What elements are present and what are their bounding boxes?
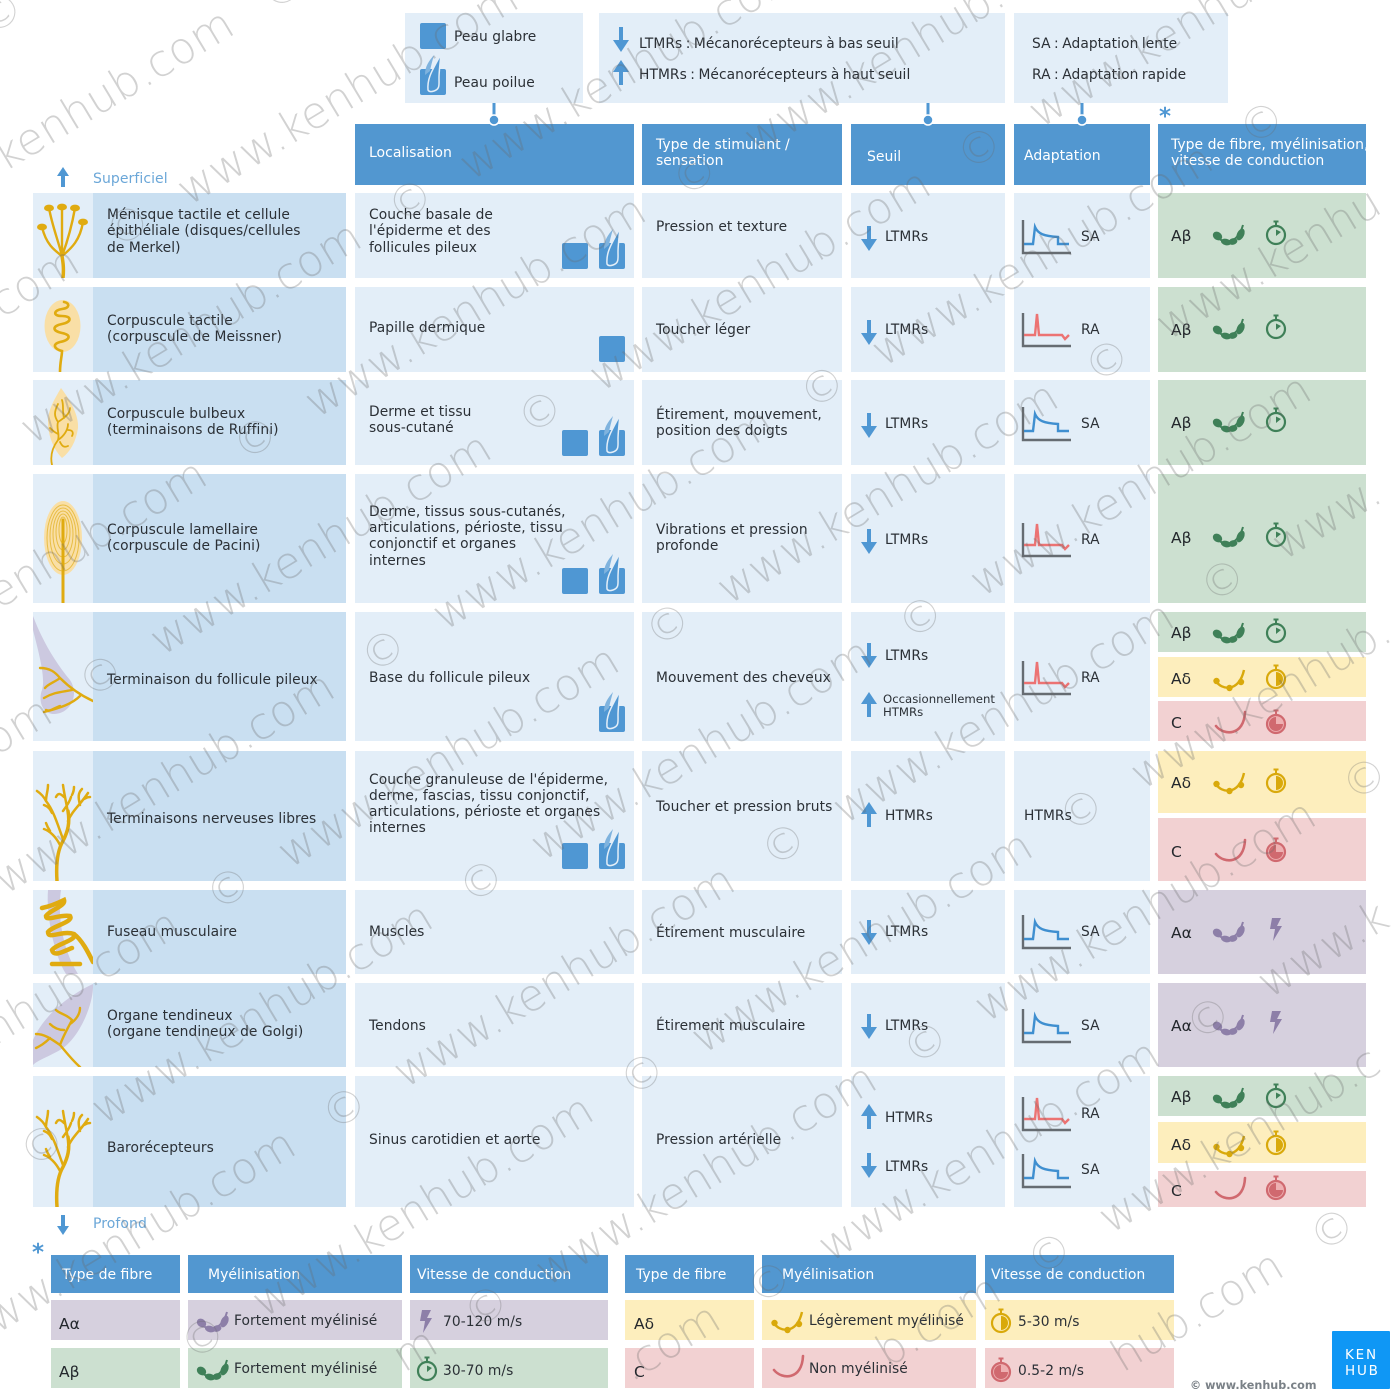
row 8: Golgi tendon organ: (organe tendineux de Golgi) bbox=[107, 1024, 303, 1040]
fibre key: right table: 0.5-2 m/s bbox=[1018, 1363, 1084, 1379]
icon: tendon organ bbox=[33, 984, 93, 1067]
row 9: baroreceptors: Sinus carotidien et aorte bbox=[369, 1132, 540, 1148]
icon: high threshold arrow bbox=[613, 60, 629, 85]
fibre cells: C bbox=[1171, 714, 1182, 732]
watermark: m © www.kenhub.com © www.kenhub.com © bbox=[383, 746, 1397, 1383]
row 4: Pacini: LTMRs bbox=[885, 532, 928, 548]
fibre key: left table bbox=[51, 1255, 608, 1388]
row 9: baroreceptors bbox=[33, 1076, 1366, 1207]
icon: Meissner corpuscle bbox=[44, 300, 80, 372]
column headers: Localisation bbox=[369, 145, 452, 161]
row 2: Meissner: (corpuscule de Meissner) bbox=[107, 329, 282, 345]
row 6: free nerve endings: Terminaisons nerveuses libres bbox=[106, 811, 316, 827]
row 2: Meissner: LTMRs bbox=[885, 322, 928, 338]
fibre cells: Aβ bbox=[1171, 1088, 1192, 1106]
fibre key: left table: 30-70 m/s bbox=[443, 1363, 513, 1379]
row 7: muscle spindle: Fuseau musculaire bbox=[107, 924, 237, 940]
row 7: muscle spindle: Aα bbox=[1171, 924, 1192, 942]
row 4: Pacini: Derme, tissus sous-cutanés, bbox=[369, 504, 566, 520]
watermark: © www.kenhub.com © www.kenhub.com © www.kenhub. bbox=[171, 605, 1400, 1371]
logo: HUB bbox=[1345, 1363, 1380, 1379]
row 3: Ruffini: LTMRs bbox=[885, 416, 928, 432]
fibre cells: C bbox=[1171, 843, 1182, 861]
fibre key: left table: Aβ bbox=[59, 1363, 80, 1381]
row 4: Pacini: articulations, périoste, tissu bbox=[369, 520, 563, 536]
row 5: hair follicle: Terminaison du follicule pileux bbox=[106, 672, 318, 688]
icon: hairy skin bbox=[599, 691, 625, 732]
fibre key: left table: Aα bbox=[59, 1315, 80, 1333]
row 1: Merkel: Ménisque tactile et cellule bbox=[107, 207, 290, 223]
column headers: Type de stimulant / bbox=[655, 137, 790, 153]
icon: muscle spindle bbox=[42, 890, 93, 974]
depth arrow: deep: Profond bbox=[93, 1216, 147, 1232]
row 3: Ruffini: (terminaisons de Ruffini) bbox=[107, 422, 279, 438]
fibre cells: Aδ bbox=[1171, 774, 1191, 792]
row 9: baroreceptors: Barorécepteurs bbox=[107, 1140, 214, 1156]
legend: skin types bbox=[405, 13, 583, 103]
fibre key: right table: Type de fibre bbox=[635, 1267, 726, 1283]
row 4: Pacini: Corpuscule lamellaire bbox=[107, 522, 258, 538]
row 1: Merkel: Couche basale de bbox=[369, 207, 493, 223]
row 6: free nerve endings bbox=[33, 751, 1366, 881]
row 3: Ruffini: Aβ bbox=[1171, 414, 1192, 432]
fibre key: left table: Type de fibre bbox=[61, 1267, 152, 1283]
row 1: Merkel: Pression et texture bbox=[656, 219, 787, 235]
row 6: free nerve endings: Couche granuleuse de l'épiderme, bbox=[369, 772, 608, 788]
row 2: Meissner: Aβ bbox=[1171, 321, 1192, 339]
fibre key: right table: Légèrement myélinisé bbox=[809, 1313, 964, 1329]
fibre cells: Aβ bbox=[1171, 624, 1192, 642]
fibre cells bbox=[1158, 1076, 1366, 1207]
label: LTMRs: LTMRs : Mécanorécepteurs à bas seuil bbox=[639, 36, 899, 52]
watermark: ww.kenhub.com © www.kenhub.com © www.kenhub.com © www. bbox=[0, 466, 1390, 1344]
asterisk: fibre column: * bbox=[1159, 104, 1171, 130]
column headers: Adaptation bbox=[1024, 148, 1101, 164]
row 8: Golgi tendon organ: Aα bbox=[1171, 1017, 1192, 1035]
fibre key: right table bbox=[625, 1255, 1174, 1388]
row 9: baroreceptors: SA bbox=[1081, 1162, 1100, 1178]
row 8: Golgi tendon organ bbox=[33, 983, 1366, 1067]
fibre key: left table: Vitesse de conduction bbox=[417, 1267, 571, 1283]
fibre key: left table: 70-120 m/s bbox=[443, 1314, 522, 1330]
legend connectors bbox=[489, 103, 1087, 125]
row 3: Ruffini: SA bbox=[1081, 416, 1100, 432]
row 6: free nerve endings: Toucher et pression bruts bbox=[655, 799, 832, 815]
row 7: muscle spindle bbox=[33, 890, 1366, 974]
fibre key: right table: Myélinisation bbox=[782, 1267, 874, 1283]
watermark: b.com © www.kenhub.c bbox=[867, 1036, 1389, 1378]
row 7: muscle spindle: SA bbox=[1081, 924, 1100, 940]
row 6: free nerve endings: HTMRs bbox=[885, 808, 933, 824]
row 2: Meissner: Corpuscule tactile bbox=[107, 313, 233, 329]
row 4: Pacini: profonde bbox=[656, 538, 718, 554]
copyright: © www.kenhub.com bbox=[1190, 1379, 1316, 1392]
row 3: Ruffini bbox=[33, 380, 1366, 465]
row 8: Golgi tendon organ: Tendons bbox=[368, 1018, 426, 1034]
fibre cells bbox=[1158, 612, 1366, 741]
depth arrow: deep bbox=[57, 1215, 147, 1235]
row 7: muscle spindle: LTMRs bbox=[885, 924, 928, 940]
fibre key: right table: Aδ bbox=[634, 1315, 654, 1333]
icon: Pacinian corpuscle bbox=[44, 501, 82, 603]
row 1: Merkel: épithéliale (disques/cellules bbox=[107, 223, 301, 239]
row 9: baroreceptors: HTMRs bbox=[885, 1110, 933, 1126]
row 4: Pacini: Aβ bbox=[1171, 529, 1192, 547]
row 4: Pacini: internes bbox=[369, 553, 426, 569]
row 3: Ruffini: position des doigts bbox=[656, 423, 788, 439]
column headers: Type de fibre, myélinisation, bbox=[1170, 137, 1368, 153]
row 3: Ruffini: Derme et tissu bbox=[369, 404, 471, 420]
icon: hair follicle ending bbox=[33, 616, 93, 714]
column headers: Seuil bbox=[867, 149, 901, 165]
watermark: .com © www.kenhub.com © www.k bbox=[611, 891, 1398, 1392]
row 4: Pacini: (corpuscule de Pacini) bbox=[107, 538, 261, 554]
logo: KEN bbox=[1345, 1347, 1378, 1363]
row 5: hair follicle: HTMRs bbox=[883, 705, 923, 719]
fibre cells: Aδ bbox=[1171, 670, 1191, 688]
icon: hairy skin bbox=[420, 54, 446, 95]
row 1: Merkel: l'épiderme et des bbox=[369, 223, 491, 239]
icon: glabrous skin bbox=[420, 23, 446, 49]
row 4: Pacini: conjonctif et organes bbox=[369, 536, 516, 552]
row 1: Merkel: SA bbox=[1081, 229, 1100, 245]
icon: Merkel disc bbox=[37, 204, 88, 278]
watermark: hub.com © bbox=[1102, 1197, 1364, 1382]
row 4: Pacini: RA bbox=[1081, 532, 1100, 548]
row 1: Merkel bbox=[33, 193, 1366, 278]
fibre key: left table: Fortement myélinisé bbox=[234, 1361, 377, 1377]
row 2: Meissner: Papille dermique bbox=[369, 320, 485, 336]
row 9: baroreceptors: LTMRs bbox=[885, 1159, 928, 1175]
depth arrow: superficial: Superficiel bbox=[93, 171, 168, 187]
row 7: muscle spindle: Étirement musculaire bbox=[656, 924, 805, 941]
row 6: free nerve endings: internes bbox=[369, 820, 426, 836]
watermark: www.kenhub.com © www.kenhub.com © www.kenhub.com © bbox=[0, 90, 1294, 905]
legend: thresholds bbox=[599, 13, 1005, 103]
row 1: Merkel: Aβ bbox=[1171, 227, 1192, 245]
row 5: hair follicle: Base du follicule pileux bbox=[369, 670, 530, 686]
fibre key: left table: Myélinisation bbox=[208, 1267, 300, 1283]
row 4: Pacini bbox=[33, 474, 1366, 603]
row 5: hair follicle: Mouvement des cheveux bbox=[656, 670, 831, 686]
icon: low threshold arrow bbox=[613, 27, 629, 52]
icons: skin types bbox=[562, 828, 625, 869]
fibre cells: C bbox=[1171, 1182, 1182, 1200]
row 8: Golgi tendon organ: Organe tendineux bbox=[107, 1008, 233, 1024]
row 5: hair follicle: Occasionnellement bbox=[883, 692, 995, 706]
row 8: Golgi tendon organ: Étirement musculaire bbox=[656, 1017, 805, 1034]
row 2: Meissner bbox=[33, 287, 1366, 372]
row 9: baroreceptors: Pression artérielle bbox=[656, 1132, 781, 1148]
row 6: free nerve endings: HTMRs bbox=[1024, 808, 1072, 824]
row 9: baroreceptors: RA bbox=[1081, 1106, 1100, 1122]
fibre key: right table: 5-30 m/s bbox=[1018, 1314, 1080, 1330]
row 6: free nerve endings: articulations, périoste et organes bbox=[369, 804, 600, 820]
label: Peau poilue: Peau poilue bbox=[454, 75, 535, 91]
fibre cells: Aδ bbox=[1171, 1136, 1191, 1154]
row 3: Ruffini: Corpuscule bulbeux bbox=[107, 406, 245, 422]
row 5: hair follicle: RA bbox=[1081, 670, 1100, 686]
row 2: Meissner: Toucher léger bbox=[655, 322, 751, 338]
depth arrow: superficial bbox=[57, 167, 168, 187]
asterisk: key: * bbox=[32, 1240, 44, 1266]
legend: adaptation bbox=[1014, 13, 1228, 103]
row 1: Merkel: LTMRs bbox=[885, 229, 928, 245]
row 8: Golgi tendon organ: LTMRs bbox=[885, 1018, 928, 1034]
fibre key: right table: C bbox=[634, 1363, 645, 1381]
column headers: vitesse de conduction bbox=[1171, 153, 1324, 169]
row 5: hair follicle bbox=[33, 612, 1366, 741]
row 2: Meissner: RA bbox=[1081, 322, 1100, 338]
fibre key: left table: Fortement myélinisé bbox=[234, 1313, 377, 1329]
fibre cells bbox=[1158, 751, 1366, 881]
row 3: Ruffini: sous-cutané bbox=[369, 420, 454, 436]
icon: free nerve endings bbox=[37, 785, 90, 881]
column headers bbox=[355, 124, 1368, 185]
row 1: Merkel: de Merkel) bbox=[107, 240, 181, 256]
column headers: sensation bbox=[656, 153, 723, 169]
logo bbox=[1332, 1331, 1390, 1389]
row 6: free nerve endings: derme, fascias, tissu conjonctif, bbox=[369, 788, 590, 804]
fibre key: right table: Non myélinisé bbox=[809, 1361, 908, 1377]
fibre key: right table: Vitesse de conduction bbox=[991, 1267, 1145, 1283]
row 7: muscle spindle: Muscles bbox=[369, 924, 424, 940]
icons: skin types bbox=[562, 415, 625, 456]
legend: adaptation: SA : Adaptation lente bbox=[1032, 36, 1177, 52]
legend: adaptation: RA : Adaptation rapide bbox=[1032, 67, 1186, 83]
icons: skin types bbox=[562, 553, 625, 594]
icon: baroreceptor bbox=[37, 1111, 90, 1207]
label: Peau glabre: Peau glabre bbox=[454, 29, 536, 45]
row 8: Golgi tendon organ: SA bbox=[1081, 1018, 1100, 1034]
label: HTMRs: HTMRs : Mécanorécepteurs à haut seuil bbox=[639, 67, 910, 83]
row 3: Ruffini: Étirement, mouvement, bbox=[656, 406, 822, 423]
icons: skin types bbox=[562, 228, 625, 269]
row 4: Pacini: Vibrations et pression bbox=[656, 522, 808, 538]
row 1: Merkel: follicules pileux bbox=[369, 240, 477, 256]
row 5: hair follicle: LTMRs bbox=[885, 648, 928, 664]
icon: glabrous skin bbox=[599, 336, 625, 362]
icon: Ruffini corpuscle bbox=[48, 388, 78, 465]
